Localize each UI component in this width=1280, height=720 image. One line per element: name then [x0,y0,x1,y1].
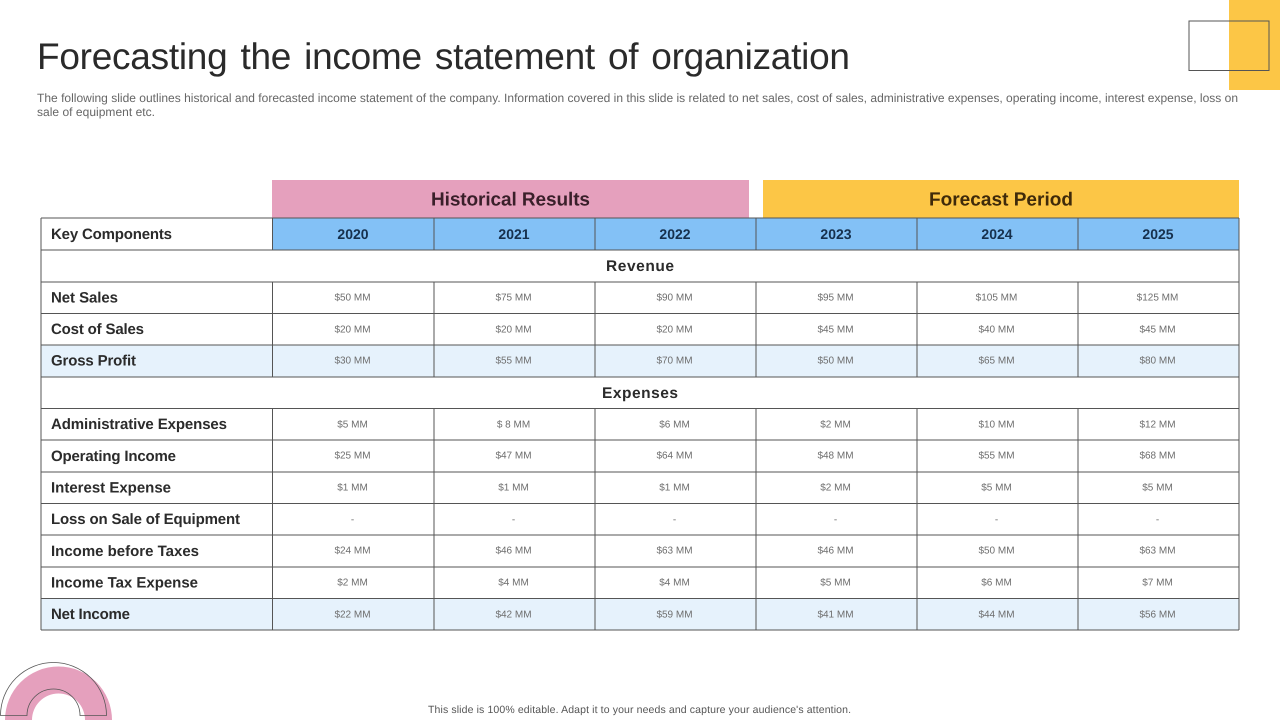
year header row: 2024 [981,226,1013,242]
row: administrative expenses [51,416,1176,433]
row: cost of sales: $20 MM [334,324,371,336]
row: interest expense: $2 MM [820,482,851,494]
row: cost of sales [51,321,1176,338]
row: net income: $42 MM [495,610,532,620]
header: historical results [272,180,749,218]
row: interest expense [51,480,1173,496]
row: gross profit: $55 MM [495,356,532,366]
row: income before taxes: $63 MM [656,546,693,556]
row: gross profit: $70 MM [656,356,693,366]
row: operating income [51,448,1176,465]
year header row [51,226,1174,243]
row: administrative expenses: $6 MM [659,420,690,430]
row: operating income: Operating Income [51,448,176,465]
row: administrative expenses: Administrative Expenses [51,416,227,433]
description text: sale of equipment etc. [37,105,155,119]
row: gross profit: $50 MM [817,356,854,366]
row: cost of sales: $45 MM [1139,324,1176,336]
row: income before taxes: $63 MM [1139,546,1176,556]
year header row: 2022 [659,226,691,242]
row: cost of sales: $20 MM [656,324,693,336]
description text: The following slide outlines historical and forecasted income statement of the company. Information covered in this slide is related to net sales, cost of sales, administrative expenses, operating income, interest expense, loss on [37,91,1238,105]
row: net income: $56 MM [1139,610,1176,620]
corner decoration: yellow block with outlined rectangle [1189,0,1280,90]
row: net sales: $50 MM [334,292,371,304]
row: interest expense: $1 MM [337,482,368,494]
row: loss on sale of equipment: - [673,514,676,526]
title: Forecasting the income statement of organization [37,36,850,77]
corner decoration: pink arch with outline [0,662,112,720]
header: forecast period: Forecast Period [929,190,1073,210]
description text [37,91,1238,119]
row: operating income: $64 MM [656,450,693,462]
row: income tax expense: Income Tax Expense [51,574,198,592]
row: income before taxes: Income before Taxes [51,543,199,560]
header: forecast period [763,180,1239,218]
row: interest expense: $1 MM [498,482,529,494]
row: administrative expenses: $5 MM [337,420,368,430]
row: net sales: $90 MM [656,292,693,304]
row: administrative expenses: $2 MM [820,420,851,430]
row: administrative expenses: $12 MM [1139,420,1176,430]
row: loss on sale of equipment: - [351,514,354,526]
row: income tax expense: $4 MM [498,578,529,588]
row: loss on sale of equipment: Loss on Sale of Equipment [51,511,240,528]
row: cost of sales: $40 MM [978,324,1015,336]
row: gross profit: $30 MM [334,356,371,366]
year header row: 2023 [820,226,852,242]
row: net income: $44 MM [978,610,1015,620]
row: operating income: $25 MM [334,450,371,462]
row: income before taxes: $46 MM [817,546,854,556]
row: income tax expense: $4 MM [659,578,690,588]
row: income before taxes [51,543,1176,560]
row: income tax expense: $7 MM [1142,578,1173,588]
row: net sales [51,290,1178,306]
row: operating income: $55 MM [978,450,1015,462]
row: net income: $41 MM [817,610,854,620]
income statement table [41,180,1239,630]
row: cost of sales: $20 MM [495,324,532,336]
row: income before taxes: $46 MM [495,546,532,556]
row: administrative expenses: $10 MM [978,420,1015,430]
row: interest expense: $5 MM [1142,482,1173,494]
row: loss on sale of equipment: - [1156,514,1159,526]
row: loss on sale of equipment: - [995,514,998,526]
row: gross profit: $65 MM [978,356,1015,366]
row: interest expense: Interest Expense [51,480,171,496]
table grid [41,218,1239,630]
row: interest expense: $5 MM [981,482,1012,494]
row: net sales: $125 MM [1137,292,1178,304]
row: net income: $22 MM [334,610,371,620]
row: interest expense: $1 MM [659,482,690,494]
row: income tax expense: $5 MM [820,578,851,588]
row: net income: $59 MM [656,610,693,620]
section: expenses: Expenses [602,385,678,402]
row backgrounds: year header and highlighted rows [41,218,1239,630]
row: loss on sale of equipment [51,511,1159,528]
row: net income: Net Income [51,606,130,623]
year header row: 2020 [337,226,369,242]
row: administrative expenses: $ 8 MM [497,420,530,430]
row: income tax expense: $6 MM [981,578,1012,588]
year header row: 2021 [498,226,530,242]
row: net sales: $75 MM [495,292,532,304]
row: net sales: $105 MM [976,292,1017,304]
year header row: 2025 [1142,226,1174,242]
row: net sales: $95 MM [817,292,854,304]
row: cost of sales: $45 MM [817,324,854,336]
row: operating income: $48 MM [817,450,854,462]
row: operating income: $47 MM [495,450,532,462]
row: income tax expense: $2 MM [337,578,368,588]
row: cost of sales: Cost of Sales [51,321,144,338]
footer note: This slide is 100% editable. Adapt it to your needs and capture your audience's attention. [428,704,851,716]
header: historical results: Historical Results [431,190,590,210]
row: income before taxes: $24 MM [334,546,371,556]
row: income tax expense [51,574,1173,592]
row: loss on sale of equipment: - [512,514,515,526]
row: net income [51,606,1176,623]
row: net sales: Net Sales [51,290,118,306]
row: gross profit [51,352,1176,370]
section: revenue: Revenue [606,258,674,275]
row: gross profit: $80 MM [1139,356,1176,366]
year header row: Key Components [51,226,172,243]
row: operating income: $68 MM [1139,450,1176,462]
row: loss on sale of equipment: - [834,514,837,526]
row: gross profit: Gross Profit [51,352,136,370]
row: income before taxes: $50 MM [978,546,1015,556]
